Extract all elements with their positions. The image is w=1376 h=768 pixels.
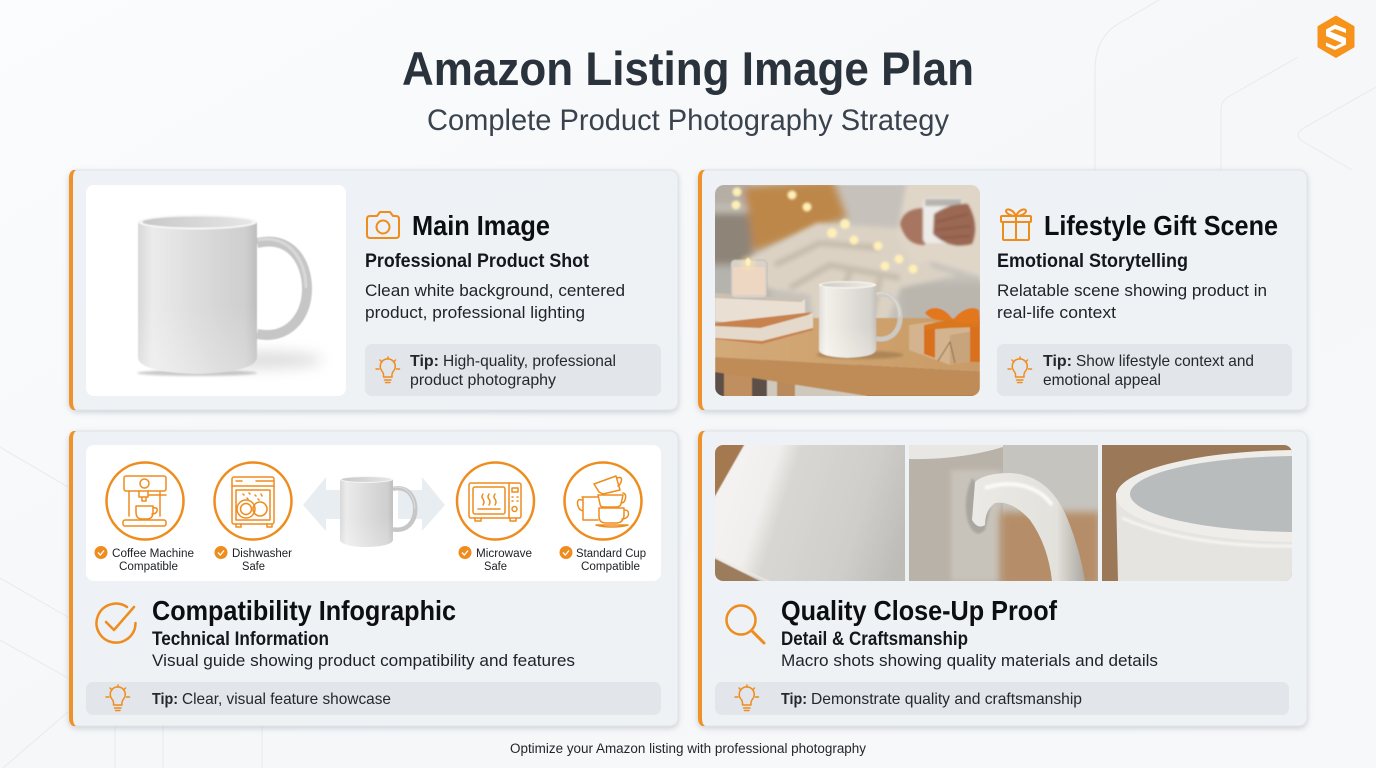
icon: gift bbox=[1001, 209, 1031, 240]
string lights bbox=[732, 188, 918, 274]
close-up photo: mug handle bbox=[909, 445, 1100, 587]
tip box: product photography bbox=[410, 372, 556, 389]
subheading: Detail & Craftsmanship bbox=[781, 629, 968, 650]
close-up photo: mug surface bbox=[715, 445, 905, 581]
description: Visual guide showing product compatibility and features bbox=[152, 651, 575, 670]
panel: quality close-up proof bbox=[698, 431, 1376, 726]
icon: camera bbox=[367, 212, 399, 238]
product photo: white mug bbox=[86, 185, 346, 396]
label: dishwasher bbox=[214, 546, 292, 573]
label: microwave bbox=[458, 546, 532, 573]
subtitle: Complete Product Photography Strategy bbox=[427, 104, 949, 137]
tip bar: Tip: bbox=[781, 691, 807, 708]
description: product, professional lighting bbox=[365, 303, 585, 322]
candle bbox=[731, 260, 767, 298]
tip bar bbox=[715, 682, 1289, 715]
heading: Compatibility Infographic bbox=[152, 595, 456, 626]
label: standard cup: Standard Cup bbox=[576, 548, 646, 560]
subheading: Emotional Storytelling bbox=[997, 251, 1188, 272]
description: real-life context bbox=[997, 303, 1116, 322]
books bbox=[715, 298, 806, 322]
label: microwave: Safe bbox=[484, 561, 507, 573]
tip bar bbox=[86, 682, 661, 715]
icon: dishwasher bbox=[214, 462, 292, 540]
description: Relatable scene showing product in bbox=[997, 281, 1267, 300]
description bbox=[365, 281, 625, 322]
icon: light bulb bbox=[376, 357, 400, 382]
label: microwave: Microwave bbox=[476, 548, 532, 560]
heading: Main Image bbox=[412, 210, 550, 241]
icon: light bulb bbox=[735, 685, 758, 710]
label: dishwasher: Safe bbox=[242, 561, 265, 573]
tip bar: Clear, visual feature showcase bbox=[182, 691, 391, 708]
description bbox=[997, 281, 1267, 322]
icon: stacked cups bbox=[564, 462, 642, 540]
close-up photo: mug rim bbox=[1102, 445, 1292, 581]
tip box bbox=[997, 344, 1292, 396]
tip box: Show lifestyle context and bbox=[1076, 353, 1254, 370]
label: coffee machine: Coffee Machine bbox=[112, 548, 194, 560]
panel: main image bbox=[69, 170, 678, 410]
subheading: Professional Product Shot bbox=[365, 251, 590, 272]
footer: Optimize your Amazon listing with professional photography bbox=[510, 741, 866, 756]
panel: lifestyle gift scene bbox=[698, 170, 1307, 410]
label: coffee machine bbox=[94, 546, 194, 573]
tip box: emotional appeal bbox=[1043, 372, 1161, 389]
description: Clean white background, centered bbox=[365, 281, 625, 300]
tip bar: Demonstrate quality and craftsmanship bbox=[811, 691, 1082, 708]
tip box: Tip: bbox=[1043, 353, 1072, 370]
title: Amazon Listing Image Plan bbox=[402, 42, 974, 95]
icon: coffee machine bbox=[106, 462, 184, 540]
heading: Lifestyle Gift Scene bbox=[1044, 210, 1278, 241]
tip box bbox=[365, 344, 661, 396]
gift box bbox=[908, 322, 971, 365]
table bbox=[715, 365, 978, 396]
lifestyle photo bbox=[715, 185, 980, 396]
description: Macro shots showing quality materials and details bbox=[781, 651, 1158, 670]
panel: compatibility infographic bbox=[69, 431, 678, 726]
infographic strip bbox=[86, 445, 661, 581]
icon: light bulb bbox=[1008, 357, 1032, 382]
center mug bbox=[340, 476, 415, 547]
icon: magnifier bbox=[726, 606, 764, 643]
heading: Quality Close-Up Proof bbox=[781, 595, 1058, 626]
tip bar: Tip: bbox=[152, 691, 178, 708]
label: coffee machine: Compatible bbox=[119, 561, 178, 573]
subheading: Technical Information bbox=[152, 629, 329, 650]
label: standard cup: Compatible bbox=[581, 561, 640, 573]
tip box: Tip: bbox=[410, 353, 439, 370]
icon: check circle bbox=[97, 604, 136, 643]
tip box: High-quality, professional bbox=[443, 353, 616, 370]
label: dishwasher: Dishwasher bbox=[232, 548, 292, 560]
icon: microwave bbox=[457, 462, 534, 540]
label: standard cup bbox=[560, 546, 646, 573]
logo: orange hexagon bbox=[1318, 16, 1354, 58]
coffee mug bbox=[816, 351, 904, 359]
icon: light bulb bbox=[106, 685, 130, 710]
arrows around mug bbox=[303, 477, 350, 531]
